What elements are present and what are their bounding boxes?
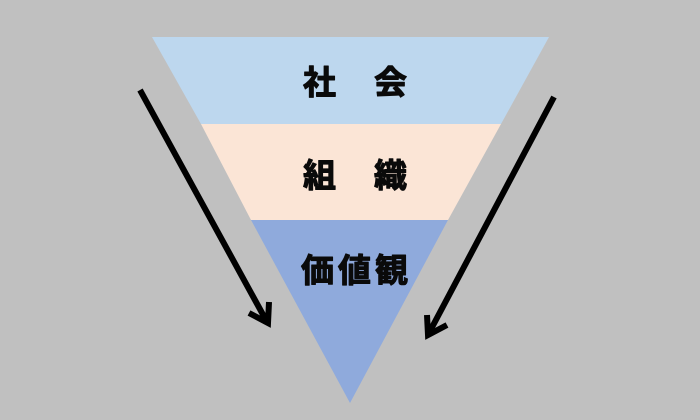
- arrow: right downward: [427, 97, 554, 335]
- band: organization: [201, 124, 501, 220]
- band: society: [152, 37, 549, 124]
- label: organization: 組: [303, 157, 336, 194]
- inverted pyramid diagram: [152, 37, 549, 403]
- arrow: left downward: [140, 90, 269, 323]
- label: society: 社: [303, 64, 336, 101]
- band: values: [251, 220, 448, 403]
- label: organization second character: 織: [374, 157, 407, 194]
- label: society second character: 会: [374, 64, 407, 101]
- label: values: 価値観: [301, 252, 408, 289]
